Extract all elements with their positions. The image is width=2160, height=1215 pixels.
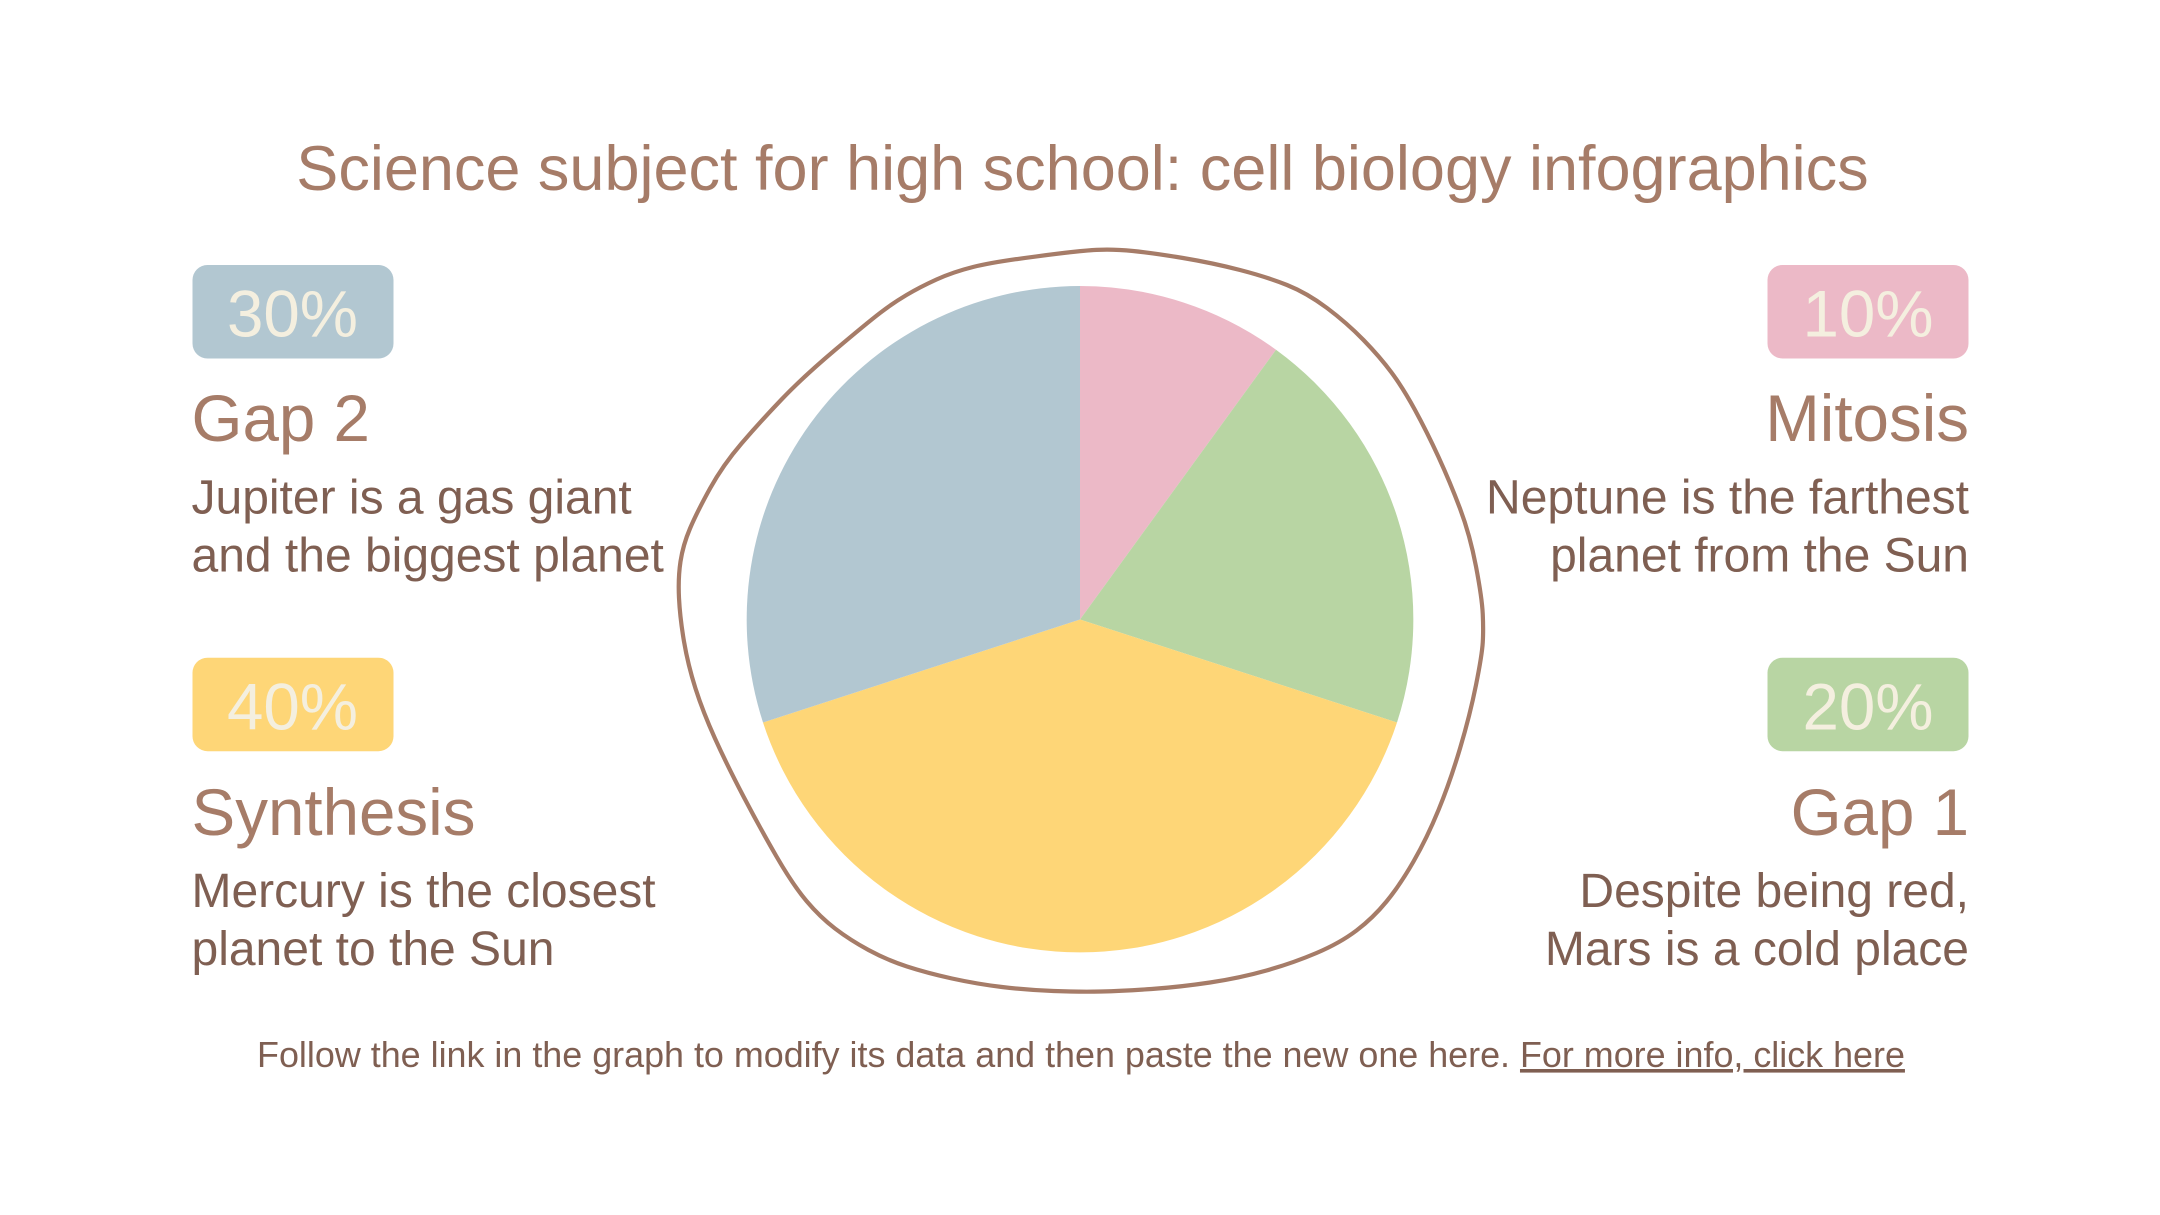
heading: Mitosis: Mitosis — [1765, 382, 1969, 455]
title: Science subject for high school: cell biology infographics — [296, 134, 1869, 204]
heading: Synthesis: Synthesis — [192, 776, 475, 849]
text: Mitosis description: planet from the Sun — [1550, 530, 1969, 582]
badge: 40%: 40% — [227, 671, 358, 744]
slice: Gap 1 20% — [1080, 350, 1413, 722]
slice: Mitosis 10% — [1080, 286, 1276, 620]
text: Mitosis description: Neptune is the farthest — [1486, 472, 1969, 524]
badge: 30% — [192, 265, 394, 358]
text: Gap 2 description: and the biggest planet — [192, 530, 664, 582]
heading: Gap 2: Gap 2 — [192, 382, 370, 455]
badge: 20% — [1768, 658, 1968, 751]
badge: 10%: 10% — [1802, 278, 1934, 351]
badge: 30%: 30% — [227, 278, 358, 351]
panel: Gap 2 — [192, 265, 664, 582]
heading: Gap 1: Gap 1 — [1791, 776, 1969, 849]
slice: Gap 2 30% — [747, 286, 1080, 722]
badge: 10% — [1768, 265, 1968, 358]
text: Gap 1 description: Mars is a cold place — [1545, 923, 1969, 976]
text: Gap 2 description: Jupiter is a gas giant — [192, 472, 632, 524]
cell membrane outline — [679, 250, 1483, 992]
text: Synthesis description: planet to the Sun — [192, 923, 554, 976]
badge: 20%: 20% — [1802, 671, 1934, 744]
text: Synthesis description: Mercury is the closest — [192, 865, 656, 918]
pie chart — [747, 286, 1413, 952]
panel: Gap 1 — [1545, 658, 1969, 976]
footer note: Follow the link in the graph to modify its data and then paste the new one here. For more info, click here — [257, 1035, 1905, 1075]
panel: Synthesis — [192, 658, 656, 976]
slice: Synthesis 40% — [763, 620, 1397, 952]
badge: 40% — [192, 658, 394, 751]
text: Gap 1 description: Despite being red, — [1579, 865, 1969, 918]
panel: Mitosis — [1486, 265, 1969, 582]
